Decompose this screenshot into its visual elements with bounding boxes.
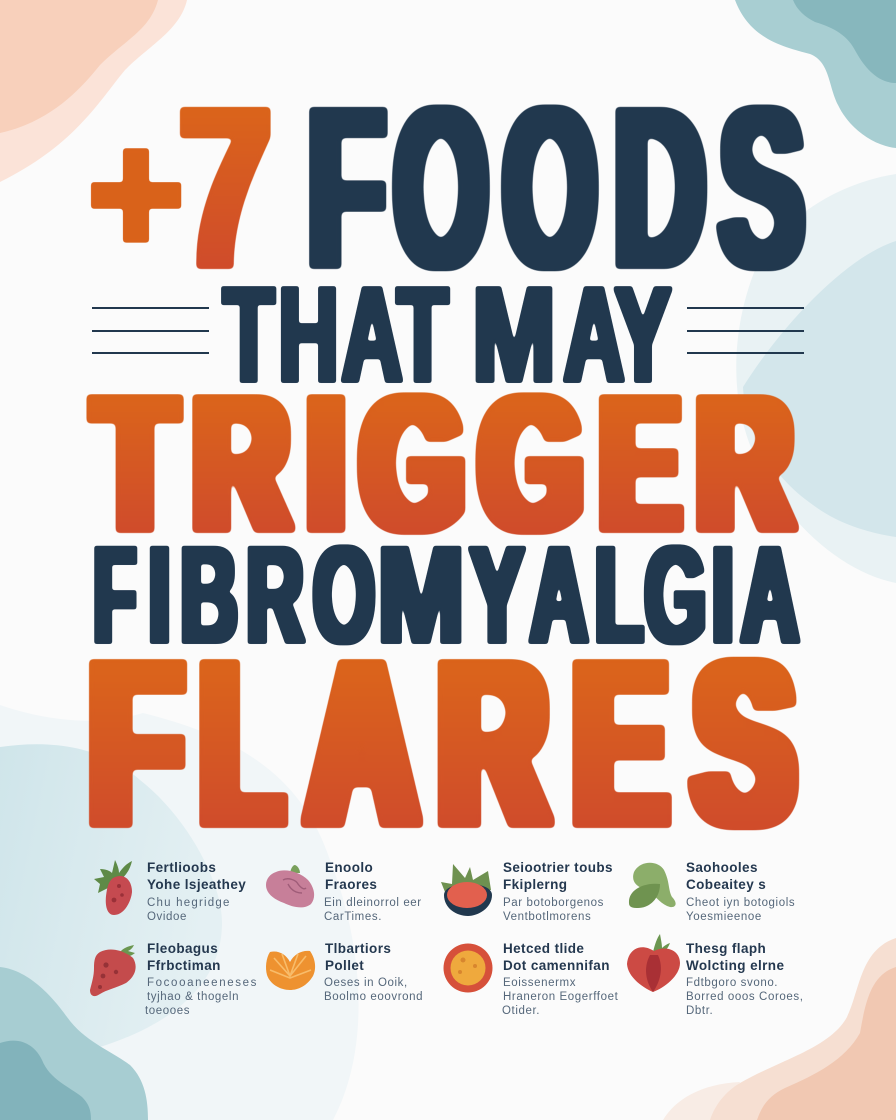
item 8: Fdtbgoro svono. [686,977,778,989]
blob: bottom-left light blue [0,705,359,1120]
text: Saohooles [686,860,758,875]
item 5: tyjhao & thogeln [147,991,239,1003]
icon: meat [266,865,314,907]
FOODS: O [394,60,488,314]
THAT MAY [223,258,671,410]
FLARES: F [90,615,182,873]
icon: red circle with yellow centre [444,944,492,992]
item 4: Cobeaitey s [686,877,766,892]
item 6: Oeses in Ooik, [324,977,408,989]
item 6: Boolmo eoovrond [324,991,423,1003]
FIBROMYALGIA: IBRO [148,518,375,671]
rules: right of THAT MAY [687,308,804,353]
TRIGGER: E [601,357,679,570]
blob: bottom-right peach [663,938,896,1120]
item 2: Fraores [325,877,377,892]
text: Fertlioobs [147,860,216,875]
TRIGGER: TRIGG [95,357,582,570]
TRIGGER [95,357,792,570]
seven: 7 [180,61,271,314]
item 5: toeooes [145,1005,190,1017]
blob: top-left peach [0,0,187,182]
item 3: Fkiplerng [503,877,567,892]
text: Hetced tlide [503,941,584,956]
item 7: Otider. [502,1005,540,1017]
item 5: Ffrbctiman [147,958,221,973]
FOODS: O [503,60,597,314]
FLARES: S [694,615,794,873]
THAT MAY: AY [564,258,671,410]
text: Enoolo [325,860,373,875]
blob: right light blue [736,174,896,583]
THAT MAY: THAT [223,258,448,410]
item 1 [94,860,246,923]
text: Fleobagus [147,941,218,956]
item 4: Yoesmieenoe [686,911,762,923]
item 2: CarTimes. [324,911,382,923]
FIBROMYALGIA: M [378,518,464,671]
item 1: Ovidoe [147,911,187,923]
item 1: Yohe lsjeathey [147,877,246,892]
THAT MAY: M [472,258,556,410]
item 1: Chu hegridge [147,897,230,909]
item 8: Borred ooos Coroes, [686,991,804,1003]
item 8: Dbtr. [686,1005,713,1017]
FIBROMYALGIA: F [94,518,136,671]
item 3: Par botoborgenos [503,897,604,909]
item 8: Wolcting elrne [686,958,784,973]
item 6 [266,941,423,1003]
FLARES: AR [308,615,547,873]
plus sign: + [88,99,184,289]
icon: green leaves [629,863,676,908]
icon: bowl with leaves [441,864,492,916]
item 7: Dot camennifan [503,958,610,973]
blob: top-right teal [735,0,896,148]
text: Tlbartiors [325,941,391,956]
item 7: Hraneron Eogerffoet [503,991,619,1003]
item 4: Cheot iyn botogiols [686,897,795,909]
item 7: Eoissenermx [503,977,576,989]
FLARES: L [202,615,281,873]
item 2: Ein dleinorrol eer [324,897,422,909]
title [88,60,804,873]
item 2 [266,860,422,923]
FLARES: E [574,615,666,873]
FLARES [90,615,794,873]
item 5: Focooaneeneses [147,977,257,989]
icon: orange slice [266,951,315,990]
text: Seiootrier toubs [503,860,613,875]
icon: strawberry [90,945,136,996]
FIBROMYALGIA: YALGIA [471,518,799,671]
item 7 [444,941,619,1017]
FIBROMYALGIA [94,518,799,671]
icon: tomato [627,934,680,992]
text: Thesg flaph [686,941,766,956]
rules: left of THAT MAY [92,308,209,353]
item 8 [627,934,804,1017]
FOODS: DS [614,60,804,314]
FOODS: F [308,60,385,314]
TRIGGER: R [697,357,792,570]
item 5 [90,941,257,1017]
FOODS [308,60,804,314]
item 6: Pollet [325,958,364,973]
item 3: Ventbotlmorens [503,911,591,923]
item 3 [441,860,613,923]
icon: strawberry [94,860,132,915]
item 4 [629,860,795,923]
